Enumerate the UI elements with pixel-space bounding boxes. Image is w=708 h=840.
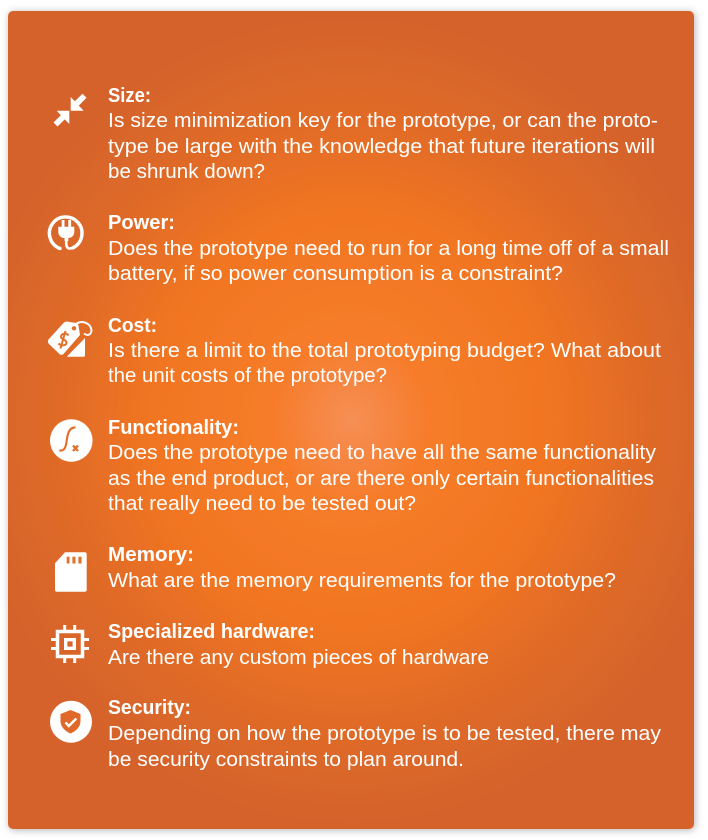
text: power description <box>108 237 669 285</box>
item: cost <box>48 315 661 387</box>
heading: size: Size: <box>108 85 151 107</box>
text: security description: Depending on how the prototype is to be tested, there may <box>108 722 662 745</box>
text: power description: Does the prototype need to run for a long time off of a small <box>108 237 669 260</box>
heading: functionality: Functionality: <box>108 417 239 439</box>
text: security description: be security constraints to plan around. <box>108 748 464 771</box>
text: functionality description: as the end product, or are there only certain functionalities <box>108 467 654 490</box>
text: size description <box>108 109 658 183</box>
text: security description <box>108 722 662 771</box>
heading: power: Power: <box>108 212 175 234</box>
text: functionality description <box>108 441 657 515</box>
heading: cost: Cost: <box>108 315 157 337</box>
icon: security shield <box>50 701 92 743</box>
item: power <box>49 212 669 285</box>
item: size <box>54 85 658 183</box>
icon: memory card <box>55 552 87 592</box>
heading: specialized hardware: Specialized hardware: <box>108 621 315 643</box>
item: memory <box>55 544 616 592</box>
icon: compress arrows <box>54 94 86 126</box>
item: security <box>50 697 662 771</box>
text: cost description: the unit costs of the prototype? <box>108 364 387 387</box>
text: cost description: Is there a limit to the total prototyping budget? What about <box>108 339 661 362</box>
text: power description: battery, if so power consumption is a constraint? <box>108 262 563 285</box>
text: functionality description: that really need to be tested out? <box>108 492 416 515</box>
item: specialized hardware <box>51 621 489 669</box>
text: size description: Is size minimization key for the prototype, or can the proto- <box>108 109 658 132</box>
heading: memory: Memory: <box>108 544 194 566</box>
icon: function integral <box>50 419 93 462</box>
icon: price tag <box>48 322 91 357</box>
icon: power plug <box>49 217 82 248</box>
icon: microchip <box>51 625 89 663</box>
text: functionality description: Does the prototype need to have all the same functionality <box>108 441 657 464</box>
text: size description: type be large with the knowledge that future iterations will <box>108 135 655 158</box>
text: cost description <box>108 339 661 387</box>
text: memory description: What are the memory requirements for the prototype? <box>108 569 616 592</box>
text: size description: be shrunk down? <box>108 160 265 183</box>
heading: security: Security: <box>108 697 191 719</box>
item: functionality <box>50 417 657 515</box>
text: hardware description: Are there any custom pieces of hardware <box>108 646 489 669</box>
